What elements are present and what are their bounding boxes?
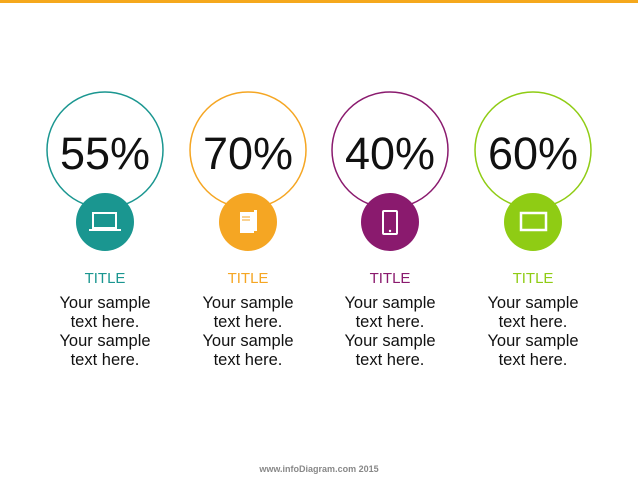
footer: www.infoDiagram.com 2015: [259, 464, 379, 474]
text block 2: [202, 270, 294, 369]
item 2: 70%: 70%: [203, 128, 293, 179]
text block 4: TITLE: [513, 270, 553, 287]
text block 1: Your sample: [59, 294, 151, 312]
text block 3: text here.: [356, 351, 424, 369]
text block 3: TITLE: [370, 270, 410, 287]
text block 4: text here.: [499, 313, 567, 331]
text block 2: TITLE: [228, 270, 268, 287]
item 1: 55%: 55%: [60, 128, 150, 179]
text block 3: text here.: [356, 313, 424, 331]
item 3: 40%: [332, 92, 448, 251]
item 2: 70%: [190, 92, 306, 251]
item 1: 55%: [47, 92, 163, 251]
text block 2: Your sample: [202, 294, 294, 312]
text block 1: TITLE: [85, 270, 125, 287]
text block 2: text here.: [214, 313, 282, 331]
text block 1: [59, 270, 151, 369]
text block 3: Your sample: [344, 332, 436, 350]
text block 3: [344, 270, 436, 369]
text block 1: text here.: [71, 351, 139, 369]
text block 4: Your sample: [487, 294, 579, 312]
text block 4: [487, 270, 579, 369]
top accent bar: [0, 0, 638, 3]
text block 1: text here.: [71, 313, 139, 331]
item 4: 60%: [475, 92, 591, 251]
text block 2: text here.: [214, 351, 282, 369]
item 3: 40%: 40%: [345, 128, 435, 179]
chart: circles: [46, 91, 592, 251]
text block 2: Your sample: [202, 332, 294, 350]
text block 4: Your sample: [487, 332, 579, 350]
text block 3: Your sample: [344, 294, 436, 312]
text block 4: text here.: [499, 351, 567, 369]
text block 1: Your sample: [59, 332, 151, 350]
item 4: 60%: 60%: [488, 128, 578, 179]
